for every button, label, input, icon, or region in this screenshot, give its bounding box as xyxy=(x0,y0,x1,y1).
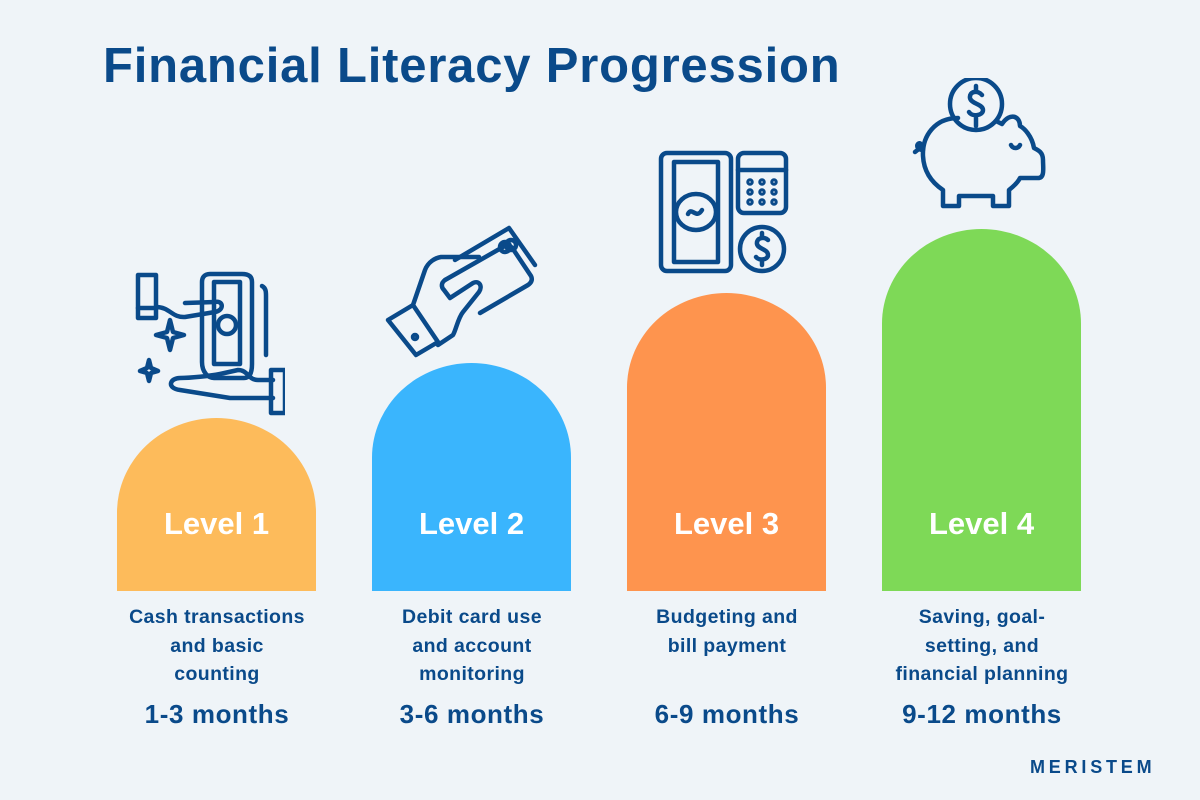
description 4: setting, and xyxy=(925,634,1039,656)
bar: level 4 xyxy=(882,229,1081,591)
bar: level 2 xyxy=(372,363,571,591)
description 3: Budgeting and xyxy=(656,606,798,628)
label: level 2: Level 2 xyxy=(419,506,524,541)
label: level 3: Level 3 xyxy=(674,506,779,541)
description 2 xyxy=(402,606,542,685)
description 4: financial planning xyxy=(896,663,1068,685)
description 3: bill payment xyxy=(668,634,786,656)
description 2: Debit card use xyxy=(402,606,542,628)
description 1: Cash transactions xyxy=(129,606,305,628)
months 2: 3-6 months xyxy=(400,699,544,729)
description 2: and account xyxy=(412,634,532,656)
title: Financial Literacy Progression xyxy=(103,39,840,93)
icon: cash hands xyxy=(136,272,285,416)
icon: hand with card xyxy=(386,226,538,358)
bar: level 3 xyxy=(627,293,826,591)
description 4 xyxy=(896,606,1068,685)
label: level 1: Level 1 xyxy=(164,506,269,541)
months 4: 9-12 months xyxy=(902,699,1062,729)
description 1: counting xyxy=(174,663,260,685)
icon: piggy bank xyxy=(912,78,1046,208)
label: level 4: Level 4 xyxy=(929,506,1034,541)
description 1 xyxy=(129,606,305,685)
description 3 xyxy=(656,606,798,656)
logo: MERISTEM xyxy=(1030,757,1155,777)
months 1: 1-3 months xyxy=(145,699,289,729)
months 3: 6-9 months xyxy=(655,699,799,729)
description 4: Saving, goal- xyxy=(919,606,1045,628)
bar: level 1 xyxy=(117,418,316,591)
icon: cash, calculator, coin xyxy=(658,150,788,274)
description 2: monitoring xyxy=(419,663,525,685)
description 1: and basic xyxy=(170,634,264,656)
